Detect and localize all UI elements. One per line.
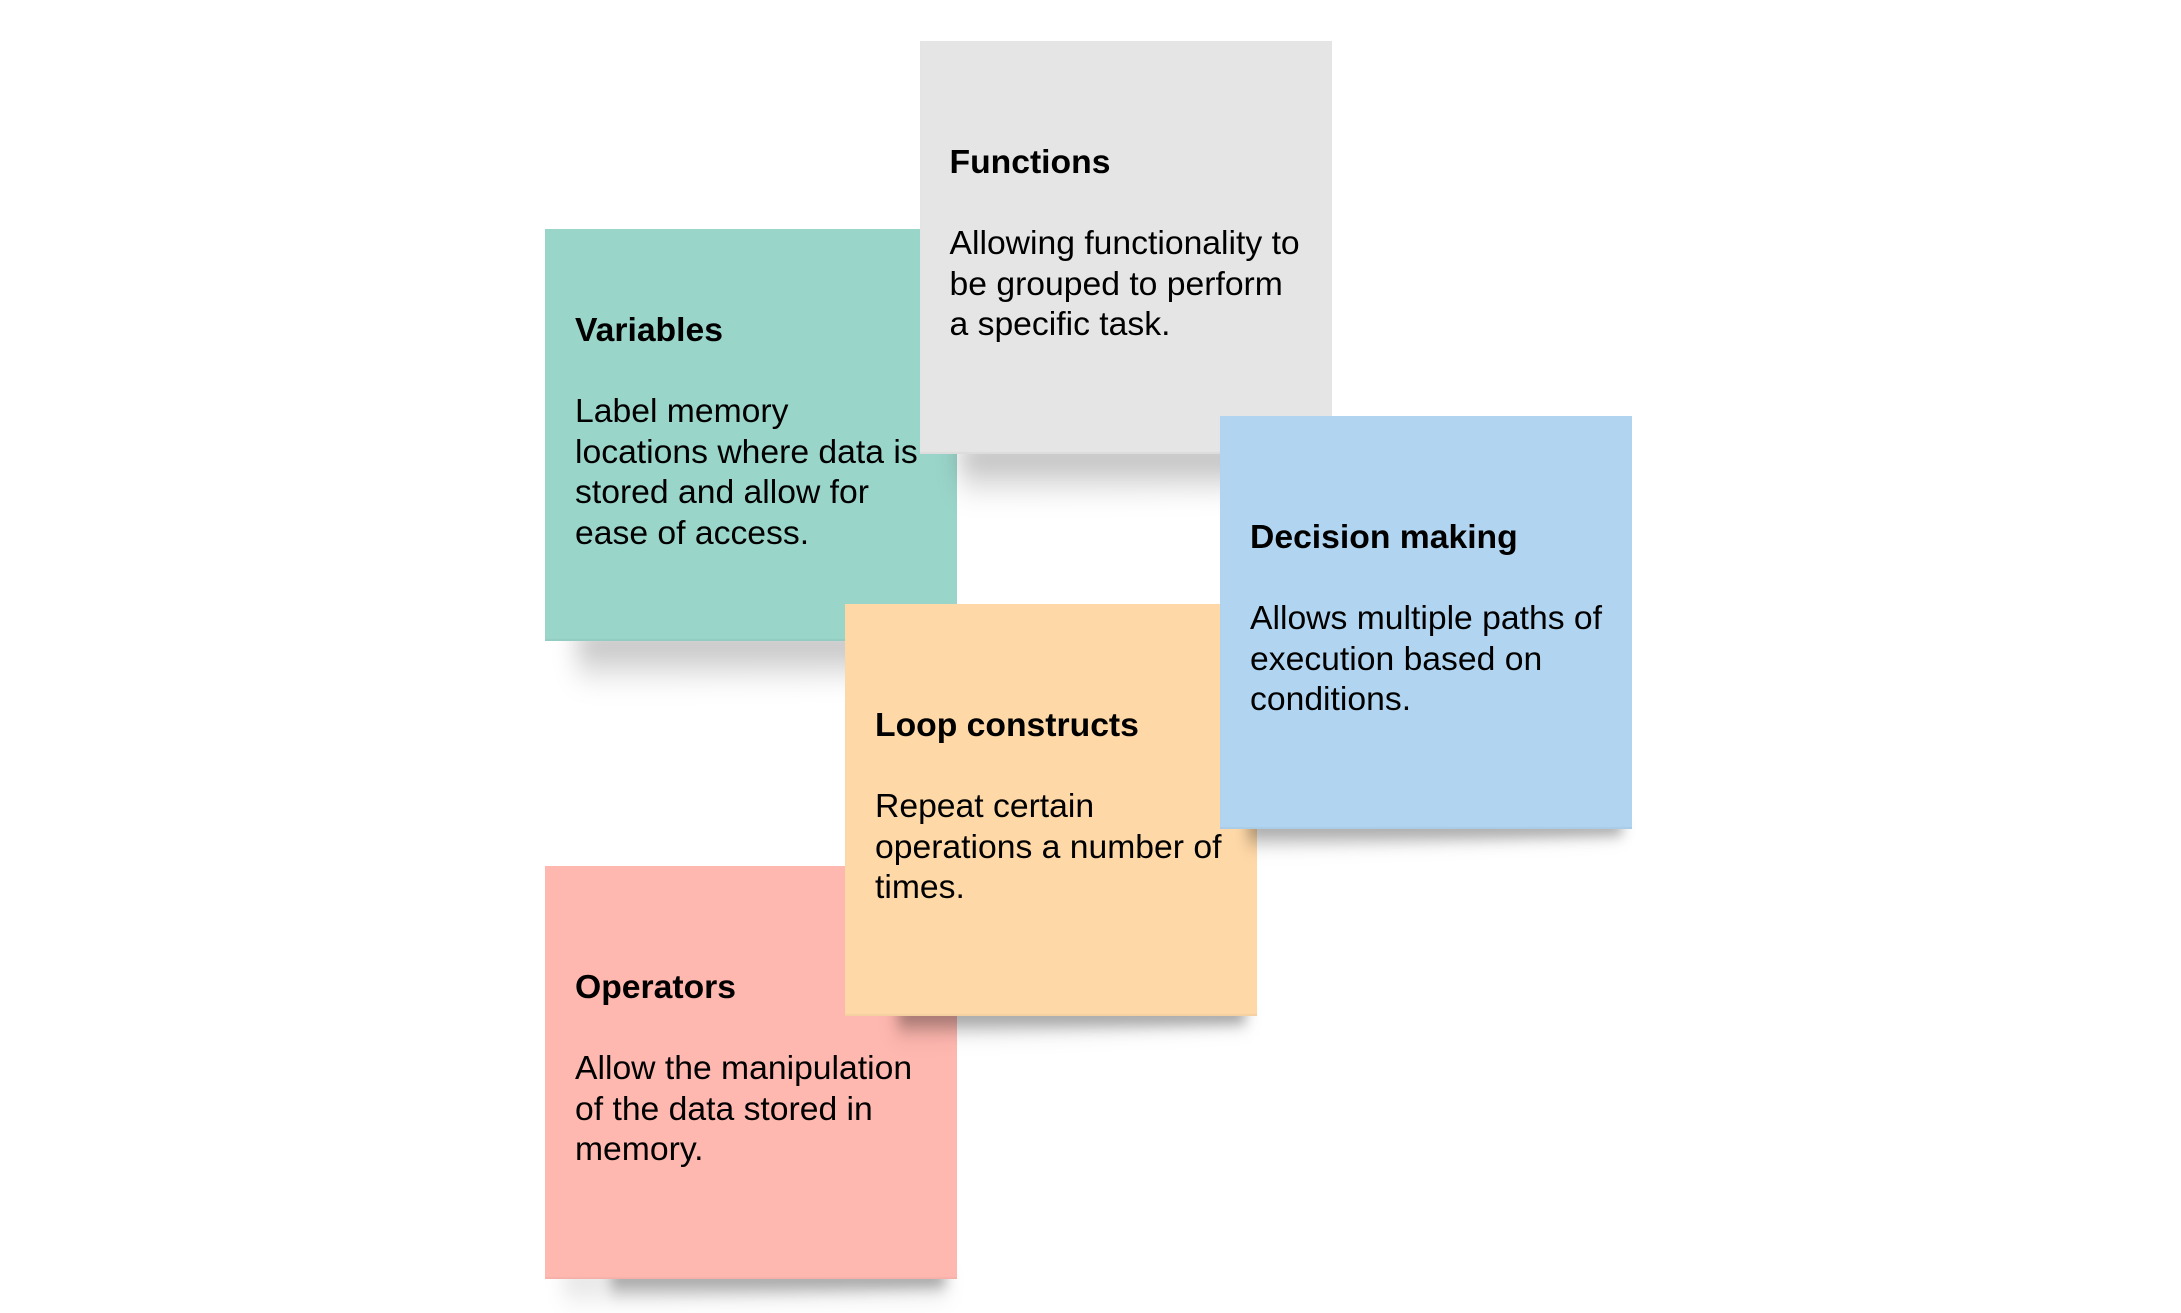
sticky note: loop constructs <box>845 604 1257 1042</box>
operators text <box>575 968 912 1168</box>
sticky note: variables <box>545 229 957 686</box>
variables text: Variables <box>575 311 723 349</box>
decision making text: Decision making <box>1250 518 1518 556</box>
variables text: locations where data is <box>575 432 918 470</box>
variables text: stored and allow for <box>575 473 869 511</box>
variables text: ease of access. <box>575 514 809 552</box>
decision making text <box>1250 518 1602 718</box>
operators text: Operators <box>575 968 736 1006</box>
functions text: Functions <box>950 143 1110 181</box>
loop constructs text: operations a number of <box>875 828 1221 866</box>
variables text: Label memory <box>575 392 788 430</box>
variables text <box>575 311 918 552</box>
loop constructs text <box>875 706 1222 906</box>
functions text <box>950 143 1300 343</box>
functions text: a specific task. <box>950 305 1170 343</box>
decision making text: execution based on <box>1250 640 1542 678</box>
loop constructs text: Repeat certain <box>875 787 1094 825</box>
sticky note: operators <box>545 866 957 1306</box>
functions text: Allowing functionality to <box>950 224 1300 262</box>
operators text: memory. <box>575 1130 704 1168</box>
sticky note: functions <box>920 41 1332 500</box>
loop constructs text: times. <box>875 868 965 906</box>
functions text: be grouped to perform <box>950 264 1283 302</box>
decision making text: Allows multiple paths of <box>1250 599 1602 637</box>
sticky note: decision making <box>1220 416 1632 853</box>
decision making text: conditions. <box>1250 680 1411 718</box>
operators text: Allow the manipulation <box>575 1049 912 1087</box>
operators text: of the data stored in <box>575 1090 873 1128</box>
loop constructs text: Loop constructs <box>875 706 1139 744</box>
